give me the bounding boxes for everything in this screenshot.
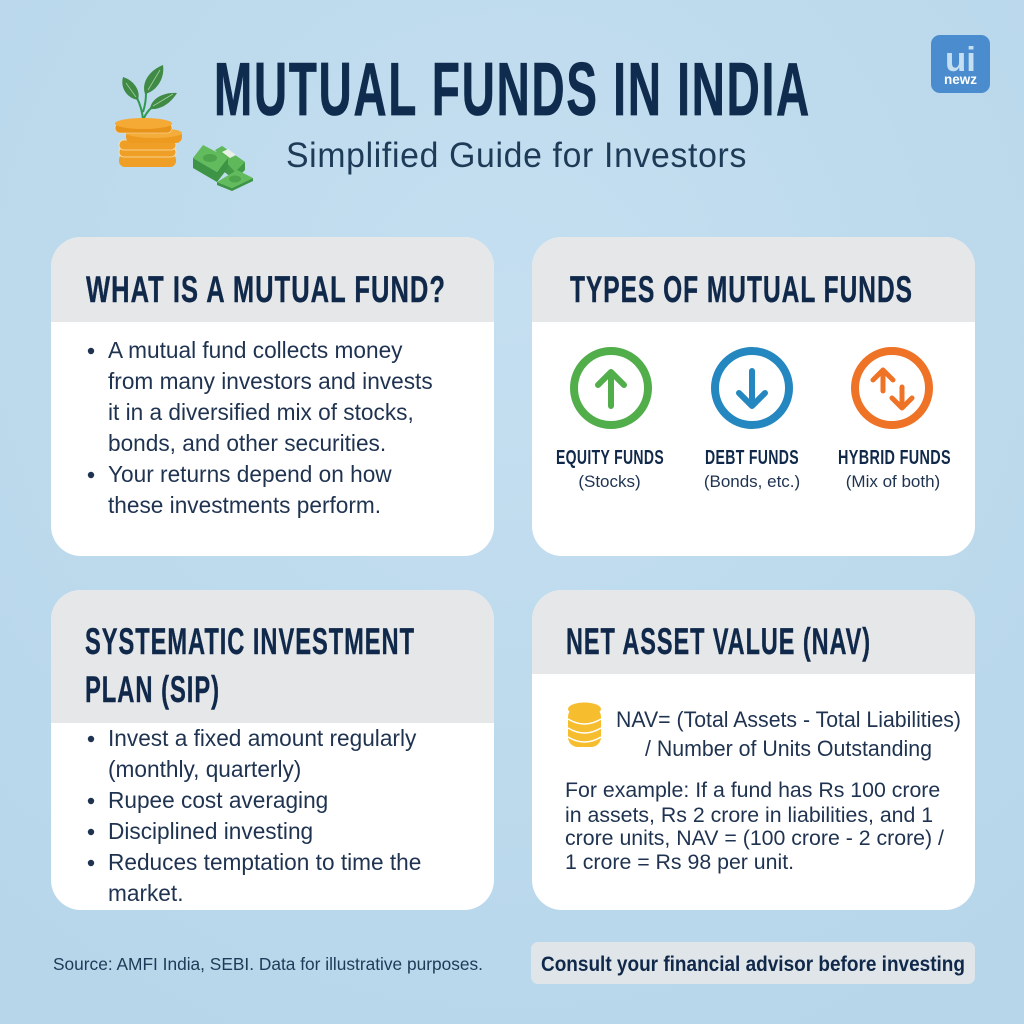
logo: ui newz	[931, 35, 990, 93]
fund type: hybrid	[838, 351, 951, 491]
fund type: hybrid: HYBRID FUNDS	[838, 446, 951, 469]
bullet text: SIP benefits: (monthly, quarterly)	[108, 756, 301, 782]
bullet text: SIP benefits: Invest a fixed amount regularly	[108, 725, 417, 751]
heading: systematic investment plan	[85, 621, 415, 710]
icon: yellow coin stack	[568, 702, 601, 747]
bullet text: definition: Your returns depend on how	[108, 461, 392, 487]
bullet text: SIP benefits: market.	[108, 880, 183, 906]
fund type: debt: DEBT FUNDS	[705, 446, 799, 469]
bullet text: SIP benefits: Disciplined investing	[108, 818, 313, 844]
NAV example: crore units, NAV = (100 crore - 2 crore) /	[565, 826, 944, 850]
NAV example	[565, 778, 944, 874]
panel: types of mutual funds	[532, 237, 975, 556]
logo: ui newz: newz	[944, 72, 977, 87]
bullet text: definition: A mutual fund collects money	[108, 337, 403, 363]
bullet text: definition: bonds, and other securities.	[108, 430, 386, 456]
NAV example: in assets, Rs 2 crore in liabilities, and 1	[565, 803, 933, 827]
NAV formula	[616, 707, 961, 761]
bullet text: definition: these investments perform.	[108, 492, 381, 518]
callout: consult your financial advisor	[531, 942, 975, 984]
panel: net asset value	[532, 590, 975, 910]
panel: what is a mutual fund	[51, 237, 494, 556]
fund type: equity: EQUITY FUNDS	[556, 446, 664, 469]
heading: systematic investment plan: SYSTEMATIC INVESTMENT	[85, 621, 415, 662]
icon: plant growing from coins with cash	[115, 65, 253, 191]
bullet text: definition: from many investors and invests	[108, 368, 433, 394]
fund type: equity	[556, 351, 664, 491]
source note: Source: AMFI India, SEBI. Data for illustrative purposes.	[53, 954, 483, 974]
bullet text: SIP benefits	[88, 725, 421, 906]
callout: consult your financial advisor: Consult your financial advisor before investing	[541, 953, 965, 976]
NAV formula: / Number of Units Outstanding	[645, 736, 932, 761]
bullet text: definition	[88, 337, 433, 518]
NAV example: For example: If a fund has Rs 100 crore	[565, 778, 940, 802]
heading: what is a mutual fund: WHAT IS A MUTUAL FUND?	[86, 269, 446, 310]
NAV formula: NAV= (Total Assets - Total Liabilities)	[616, 707, 961, 732]
panel: systematic investment plan	[51, 590, 494, 910]
logo: ui newz: ui	[945, 41, 976, 79]
bullet text: definition: it in a diversified mix of stocks,	[108, 399, 414, 425]
bullet text: SIP benefits: Reduces temptation to time the	[108, 849, 421, 875]
fund type: debt	[704, 351, 800, 491]
NAV example: 1 crore = Rs 98 per unit.	[565, 850, 794, 874]
bullet text: SIP benefits: Rupee cost averaging	[108, 787, 328, 813]
fund type: debt: (Bonds, etc.)	[704, 472, 800, 491]
fund type: hybrid: (Mix of both)	[846, 472, 940, 491]
heading: systematic investment plan: PLAN (SIP)	[85, 669, 220, 710]
subtitle: Simplified Guide for Investors	[286, 136, 747, 175]
fund type: equity: (Stocks)	[578, 472, 641, 491]
